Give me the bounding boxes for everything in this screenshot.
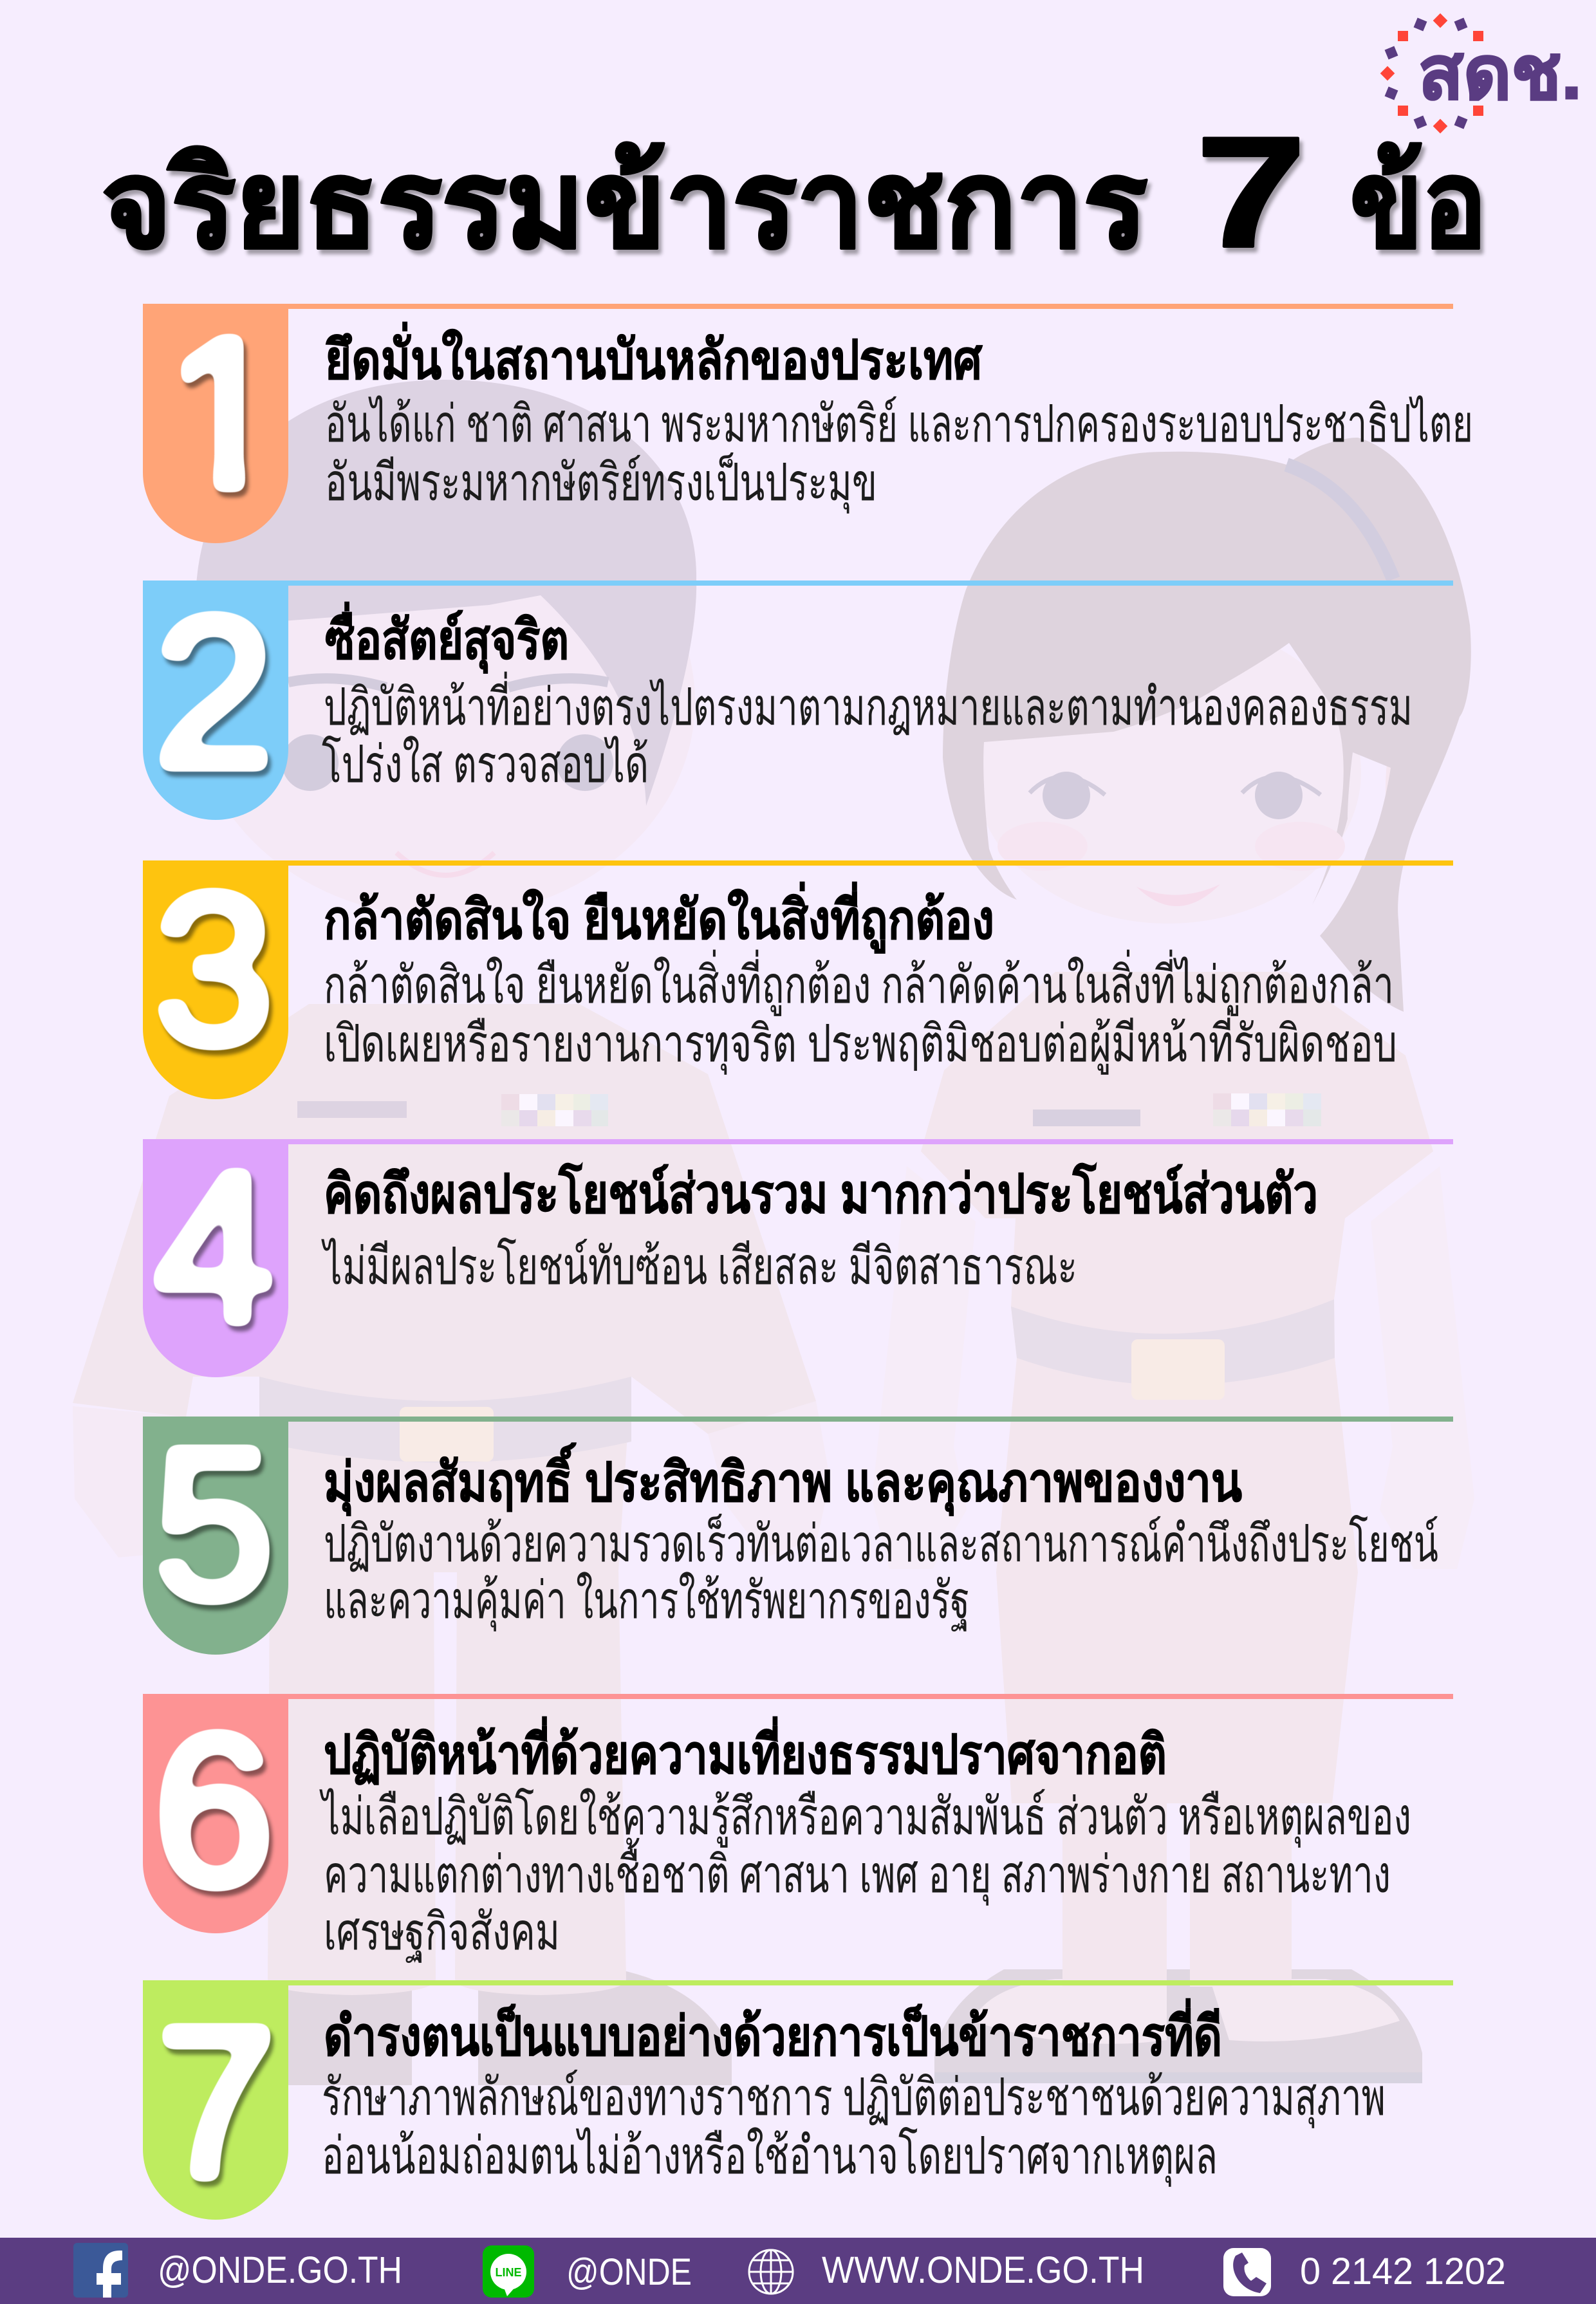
background illustration: male civil servant (73, 380, 830, 2085)
heading: ซื่อสัตย์สุจริต (325, 602, 569, 674)
body: อันมีพระมหากษัตริย์ทรงเป็นประมุข (325, 452, 877, 514)
item 7 (143, 1980, 1453, 2222)
number: 1 (165, 292, 285, 533)
footer bar (0, 2238, 1596, 2304)
body (324, 950, 1397, 1075)
footer text: facebook: @ONDE.GO.TH (158, 2249, 402, 2291)
heading: ปฏิบัติหน้าที่ด้วยความเที่ยงธรรมปราศจากอติ (324, 1716, 1167, 1785)
logo wordmark: สดช. (1418, 32, 1582, 115)
item 2 (143, 571, 1453, 820)
number tab (143, 1694, 288, 1933)
item 1 (143, 292, 1473, 543)
body: อ่อนน้อมถ่อมตนไม่อ้างหรือใช้อำนาจโดยปราศจากเหตุผล (322, 2126, 1218, 2187)
heading: คิดถึงผลประโยชน์ส่วนรวม มากกว่าประโยชน์ส่วนตัว (324, 1163, 1318, 1224)
icon: phone (1223, 2248, 1271, 2296)
number: 3 (154, 848, 274, 1089)
icon: facebook (73, 2243, 128, 2298)
heading: ดำรงตนเป็นแบบอย่างด้วยการเป็นข้าราชการที่ดี (324, 1998, 1222, 2067)
number: 6 (154, 1689, 274, 1930)
title (102, 104, 1487, 280)
footer text: line: @ONDE (566, 2251, 692, 2293)
number tab (143, 1417, 288, 1655)
number: 5 (154, 1403, 274, 1644)
bar (143, 1139, 1453, 1144)
icon: globe (749, 2250, 793, 2294)
body: เศรษฐกิจสังคม (324, 1903, 560, 1963)
logo ring (1380, 14, 1483, 133)
bar (143, 304, 1453, 309)
heading: กล้าตัดสินใจ ยืนหยัดในสิ่งที่ถูกต้อง (324, 882, 994, 954)
bar (143, 581, 1453, 586)
background illustration: female civil servant (872, 438, 1474, 2083)
number: 2 (154, 571, 274, 812)
heading: ยึดมั่นในสถานบันหลักของประเทศ (325, 322, 983, 390)
number tab (143, 581, 288, 820)
footer text: phone: 0 2142 1202 (1300, 2251, 1506, 2292)
item 5 (143, 1403, 1453, 1655)
bar (143, 1417, 1453, 1422)
item 6 (143, 1689, 1453, 1963)
icon: line (483, 2245, 534, 2298)
logo (1380, 14, 1582, 133)
body: โปร่งใส ตรวจสอบได้ (322, 735, 649, 793)
number: 7 (156, 1982, 276, 2222)
number: 4 (154, 1126, 274, 1367)
body (325, 395, 1473, 514)
footer text: website: WWW.ONDE.GO.TH (822, 2249, 1144, 2291)
number tab (143, 304, 288, 543)
title: จริยธรรมข้าราชการ (102, 136, 1147, 273)
body: ไม่มีผลประโยชน์ทับซ้อน เสียสละ มีจิตสาธารณะ (321, 1237, 1077, 1295)
icon: line: LINE (495, 2266, 522, 2279)
body (322, 672, 1413, 793)
number tab (143, 860, 288, 1099)
item 4 (143, 1126, 1453, 1377)
body (319, 1787, 1411, 1963)
item 3 (143, 848, 1453, 1099)
body (322, 2068, 1386, 2187)
body (324, 1513, 1438, 1631)
title: ข้อ (1350, 136, 1487, 273)
number tab (143, 1139, 288, 1377)
body: และความคุ้มค่า ในการใช้ทรัพยากรของรัฐ (324, 1571, 970, 1631)
bar (143, 1980, 1453, 1985)
number tab (143, 1980, 288, 2220)
heading: มุ่งผลสัมฤทธิ์ ประสิทธิภาพ และคุณภาพของงาน (324, 1442, 1242, 1516)
bar (143, 1694, 1453, 1699)
title: 7 (1196, 104, 1306, 280)
bar (143, 860, 1453, 866)
